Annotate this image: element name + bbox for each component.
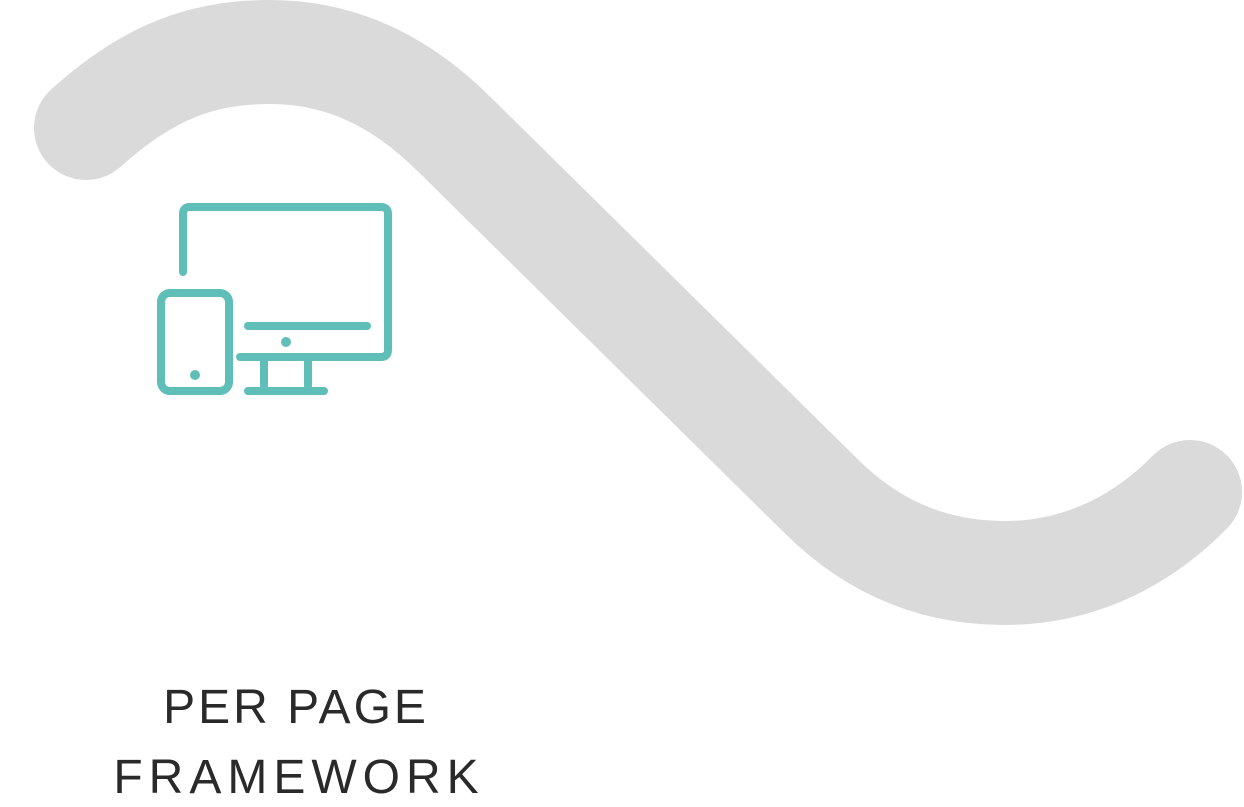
title text: PER PAGE (163, 681, 429, 734)
title text line 2: FRAMEWORK (113, 751, 485, 804)
